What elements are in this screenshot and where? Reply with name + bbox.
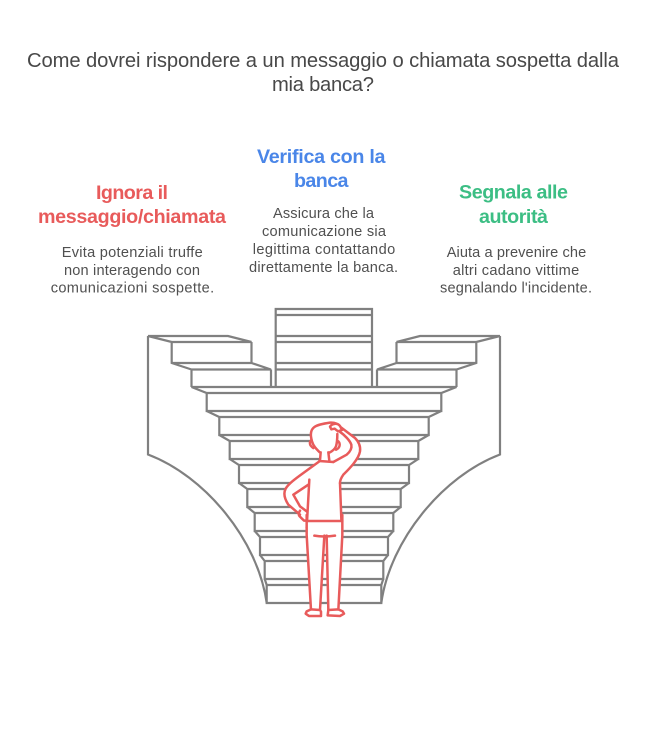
heading: segnala [459,182,568,228]
heading: verifica: banca [294,170,350,192]
person legs [306,515,344,616]
heading: segnala: Segnala alle [459,182,568,204]
text: verifica description [249,206,398,276]
waist and crease [307,521,342,536]
person upper body [284,423,360,528]
title: mia banca? [272,74,374,96]
body silhouette fill [284,423,360,528]
text: ignora description: comunicazioni sospette. [51,280,214,296]
text: verifica description: Assicura che la [273,206,375,222]
left wing [148,336,271,603]
hand on head [330,424,342,431]
right wing [377,336,500,603]
panel: segnala [440,182,592,296]
central tower [276,309,372,387]
text: segnala description: altri cadano vittime [453,263,579,279]
staircase illustration [148,309,500,603]
heading: verifica: Verifica con la [257,146,387,168]
neck [319,452,333,462]
panel: ignora [38,182,227,296]
text: segnala description [440,245,592,296]
heading: segnala: autorità [479,206,548,228]
ears [310,440,313,448]
right foot [328,609,344,616]
hand on hip [299,511,307,521]
title [27,50,620,96]
heading: ignora: Ignora il [96,182,168,204]
raised arm [337,425,360,483]
text: ignora description: non interagendo con [64,263,200,279]
text: verifica description: comunicazione sia [262,224,387,240]
panel: verifica [249,146,398,276]
text: ignora description [51,245,214,296]
text: segnala description: Aiuta a prevenire che [447,245,586,261]
text: segnala description: segnalando l'incidente. [440,280,592,296]
torso sides [307,480,309,528]
person scratching head [284,423,360,616]
text: verifica description: direttamente la banca. [249,260,398,276]
left arm and shoulder [284,461,319,515]
text: verifica description: legittima contattando [253,242,395,258]
heading: ignora [38,182,227,228]
stacked steps [192,387,456,603]
head [311,423,339,453]
heading: verifica [257,146,387,192]
heading: ignora: messaggio/chiamata [38,206,227,228]
title: Come dovrei rispondere a un messaggio o chiamata sospetta dalla [27,50,620,72]
text: ignora description: Evita potenziali truffe [62,245,203,261]
left leg [307,521,342,610]
left foot [306,609,321,616]
